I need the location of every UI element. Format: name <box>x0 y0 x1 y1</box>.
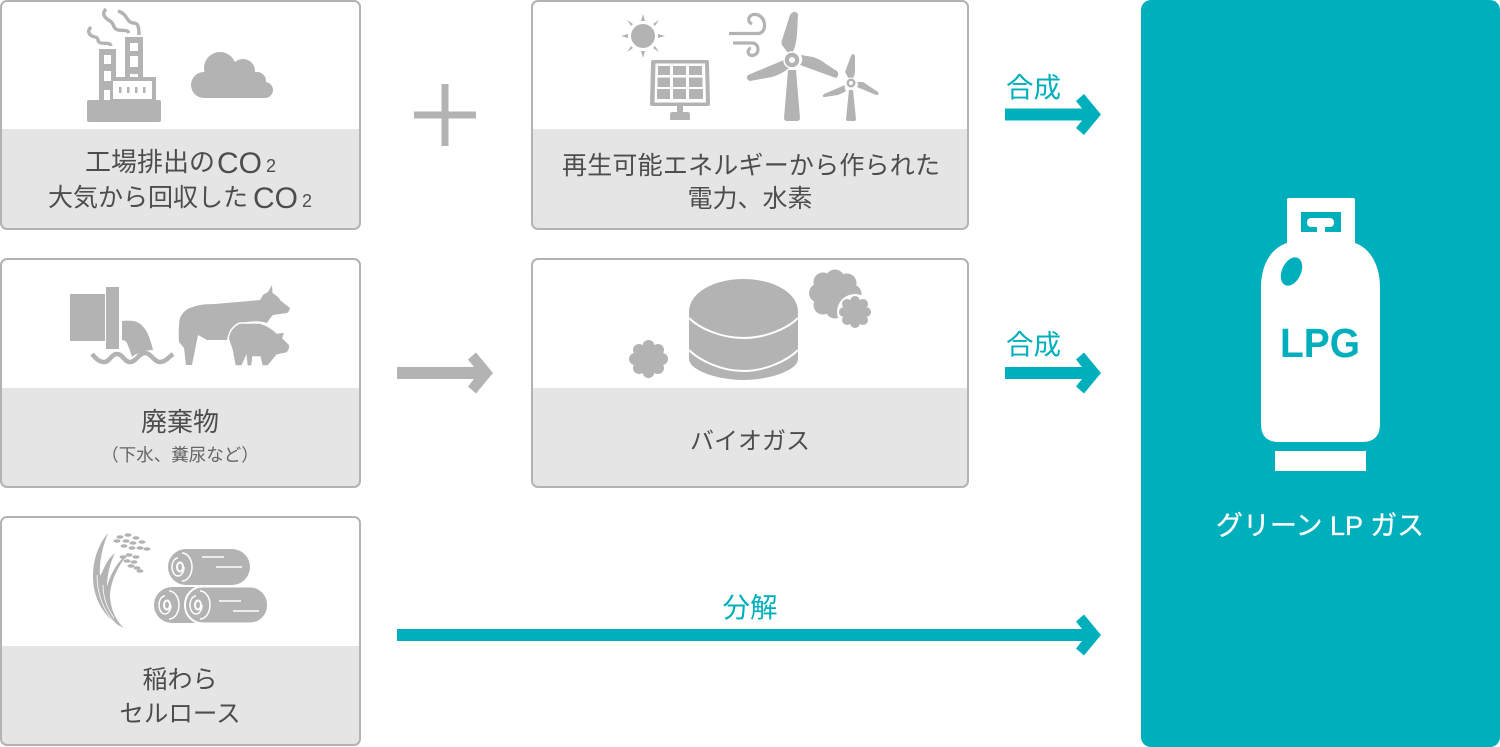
text: biogas label: バイオガス <box>690 428 810 455</box>
text: CO2 label: CO <box>217 147 262 180</box>
arrow: decomposition <box>397 592 1101 656</box>
arrow: synthesis 2 <box>1005 329 1101 394</box>
icon: LPG cylinder <box>1261 198 1380 471</box>
icon: small wind turbine <box>823 54 879 121</box>
text: green LP gas label: グリーン LP ガス <box>1216 511 1424 541</box>
text: renewable label <box>562 152 940 213</box>
arrow: decomposition: 分解 <box>722 592 778 623</box>
arrow: synthesis 1 <box>1005 72 1101 135</box>
text: rice straw label <box>119 666 241 728</box>
panel: rice straw cellulose <box>1 517 360 745</box>
icon: gas puffs <box>629 270 873 378</box>
icon: rice plant <box>93 533 150 628</box>
panel: green LP gas <box>1141 0 1500 747</box>
icon: logs <box>154 549 268 624</box>
icon: plus <box>414 84 476 146</box>
arrow: synthesis 2: 合成 <box>1006 329 1061 360</box>
text: waste label <box>101 407 259 465</box>
icon: biogas tank <box>689 279 798 380</box>
icon: factory <box>87 9 161 122</box>
text: CO2 label: 2 <box>266 156 276 176</box>
icon: wind swirl <box>729 14 765 56</box>
panel: renewable energy <box>532 1 968 229</box>
panel: biogas <box>532 259 968 487</box>
icon: cow <box>179 285 290 365</box>
arrow: synthesis 1: 合成 <box>1006 72 1061 103</box>
icon: solar panel <box>650 60 710 120</box>
text: waste label: （下水、糞尿など） <box>101 445 259 465</box>
panel: CO2 sources <box>1 1 360 229</box>
icon: large wind turbine <box>747 12 838 121</box>
text: CO2 label: 工場排出の <box>85 147 215 177</box>
arrow: gray to biogas <box>397 352 493 394</box>
icon: sewage pipe <box>70 287 173 362</box>
icon: pig <box>220 323 290 366</box>
text: renewable label: 電力、水素 <box>687 185 813 213</box>
text: renewable label: 再生可能エネルギーから作られた <box>562 152 940 180</box>
panel: waste <box>1 259 360 487</box>
text: CO2 label: 2 <box>302 191 312 211</box>
icon: LPG cylinder: LPG <box>1280 320 1360 366</box>
text: rice straw label: 稲わら <box>142 666 218 694</box>
text: rice straw label: セルロース <box>119 701 241 728</box>
text: CO2 label: 大気から回収した <box>48 184 248 212</box>
icon: cloud <box>191 52 273 98</box>
text: CO2 label: CO <box>253 182 298 215</box>
text: waste label: 廃棄物 <box>141 407 219 437</box>
text: CO2 label <box>48 147 312 215</box>
icon: sun <box>621 14 665 58</box>
